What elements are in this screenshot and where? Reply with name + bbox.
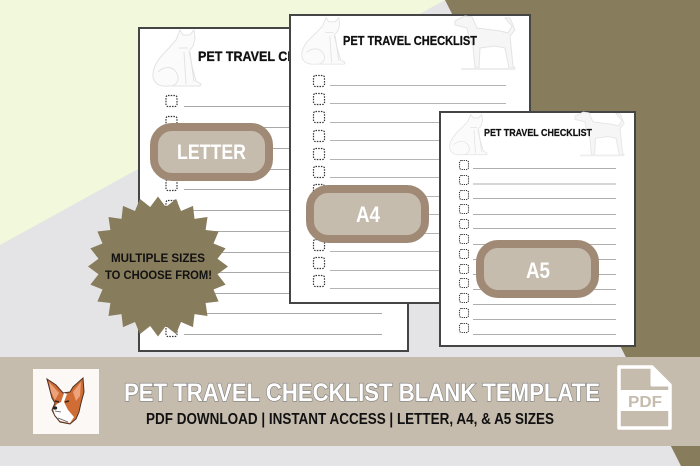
- callout: multiple sizes starburst: [88, 196, 228, 336]
- badge: A4: A4: [356, 202, 381, 227]
- icon: cat sketch letter: [153, 30, 201, 86]
- badge: A5: [480, 244, 595, 294]
- checkboxes A5: [460, 160, 468, 332]
- icon: dog sketch A5: [575, 112, 624, 155]
- panel: letter size checklist page: [139, 28, 408, 351]
- icon: PDF file: [619, 367, 670, 428]
- heading: letter page title: PET TRAVEL CHECKLIST: [198, 48, 350, 64]
- checkboxes A4: [314, 76, 324, 286]
- callout: multiple sizes starburst: TO CHOOSE FROM!: [105, 268, 212, 282]
- checklist lines letter: [184, 106, 382, 334]
- badge: A5: A5: [526, 258, 550, 283]
- badge: A4: [310, 189, 425, 239]
- panel: A4 size checklist page: [290, 15, 530, 303]
- icon: cat sketch A4: [302, 18, 345, 64]
- heading: banner title: PET TRAVEL CHECKLIST BLANK TEMPLATE: [124, 379, 600, 407]
- subtitle: PDF DOWNLOAD | INSTANT ACCESS | LETTER, A4, & A5 SIZES: [146, 411, 554, 428]
- icon: cat sketch A5: [450, 114, 487, 155]
- checklist lines A5: [473, 168, 616, 334]
- icon: dog sketch A4: [455, 16, 515, 69]
- checklist lines A4: [330, 86, 506, 288]
- heading: A4 page title: PET TRAVEL CHECKLIST: [343, 33, 477, 48]
- bottom banner: [0, 357, 700, 446]
- background: pale yellow corner: [0, 0, 445, 245]
- badge: LETTER: LETTER: [177, 141, 246, 164]
- background: olive wedge: [445, 0, 700, 466]
- callout: multiple sizes starburst: MULTIPLE SIZES: [111, 251, 205, 265]
- badge: LETTER: [154, 127, 269, 177]
- heading: A5 page title: PET TRAVEL CHECKLIST: [484, 127, 592, 139]
- checkboxes letter: [166, 96, 177, 336]
- icon: PDF file: PDF: [628, 394, 662, 411]
- panel: A5 size checklist page: [440, 112, 635, 346]
- icon: corgi logo: [33, 369, 99, 434]
